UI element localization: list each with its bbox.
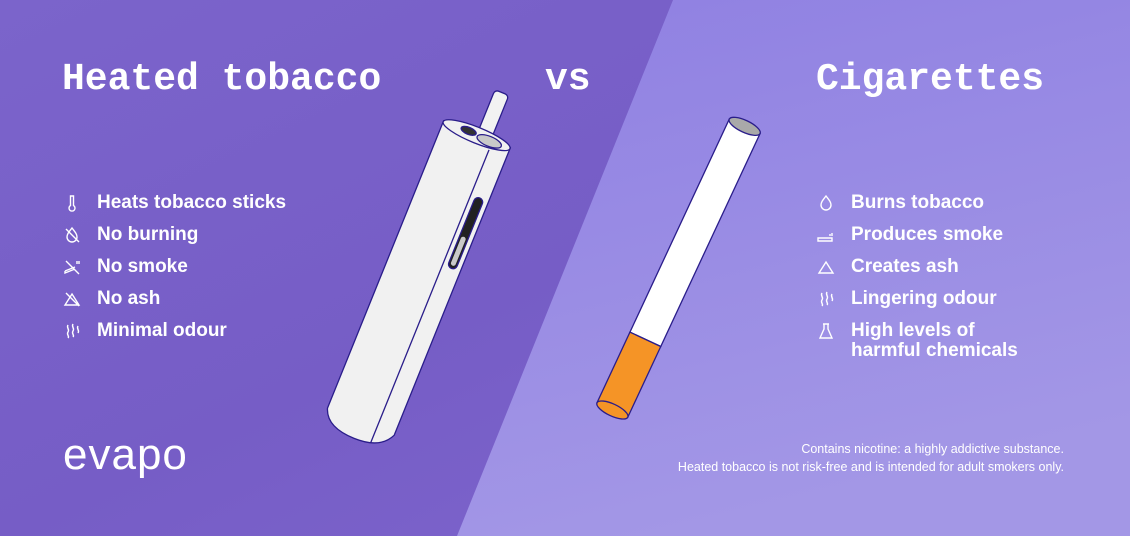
list: cigarette features: Lingering odour [851, 288, 997, 309]
title: vs: vs [545, 58, 591, 101]
list: cigarette features: Creates ash [851, 256, 959, 277]
list: heated tobacco features: No burning [97, 224, 198, 245]
logo: evapo: evapo [63, 430, 188, 479]
illustration: cigarette [596, 116, 761, 420]
list: heated tobacco features [64, 192, 286, 341]
list: cigarette features: High levels of [851, 320, 975, 341]
list: cigarette features [817, 192, 1018, 361]
disclaimer [678, 442, 1064, 474]
illustration: heated tobacco device [326, 90, 511, 444]
list: cigarette features: harmful chemicals [851, 340, 1018, 361]
disclaimer: Contains nicotine: a highly addictive substance. [801, 442, 1064, 456]
title: heated tobacco: Heated tobacco [62, 58, 381, 101]
list: heated tobacco features: No smoke [97, 256, 188, 277]
disclaimer: Heated tobacco is not risk-free and is intended for adult smokers only. [678, 460, 1064, 474]
list: heated tobacco features: Heats tobacco sticks [97, 192, 286, 213]
list: heated tobacco features: Minimal odour [97, 320, 227, 341]
list: cigarette features: Burns tobacco [851, 192, 984, 213]
title: cigarettes: Cigarettes [816, 58, 1044, 101]
list: cigarette features: Produces smoke [851, 224, 1003, 245]
list: heated tobacco features: No ash [97, 288, 160, 309]
